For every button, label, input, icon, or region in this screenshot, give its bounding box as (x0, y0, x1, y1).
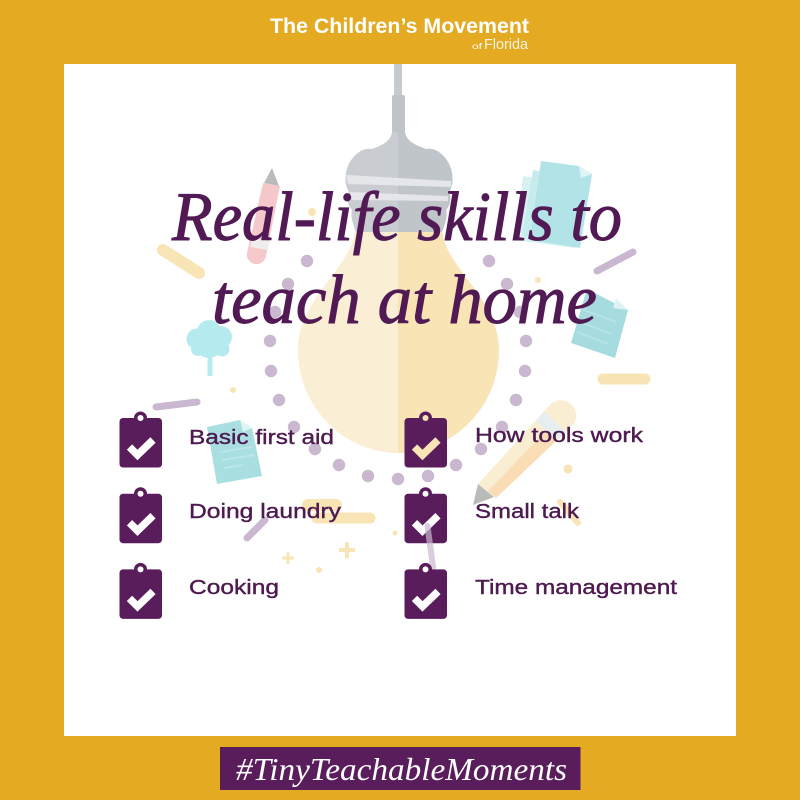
white panel (64, 64, 736, 736)
item: Doing laundry: Doing laundry (189, 500, 342, 523)
title: teach at home (212, 262, 597, 339)
header logo: The Children’s Movement (270, 15, 529, 38)
item: Small talk (404, 487, 580, 567)
header logo (270, 15, 529, 53)
checklist: right column (404, 412, 677, 619)
item: Basic first aid: Basic first aid (189, 426, 334, 449)
illustration: big yellow pencil (473, 400, 576, 505)
illustration: light bulb (298, 64, 499, 453)
illustration: small pink pencil (247, 168, 280, 264)
illustration: paper lower left (207, 420, 262, 484)
item: How tools work: How tools work (475, 424, 644, 447)
title: Real-life skills to (171, 179, 622, 256)
illustration: paper stack top right (515, 161, 592, 248)
item: Doing laundry (120, 487, 342, 543)
illustration: tree (186, 320, 232, 376)
illustration: confetti dots and plus signs (230, 208, 572, 573)
item: Cooking (120, 563, 279, 619)
illustration: dotted ring (264, 255, 532, 485)
hashtag banner: #TinyTeachableMoments (236, 751, 567, 787)
item: Basic first aid (120, 412, 334, 468)
item: How tools work (404, 412, 644, 468)
checklist: left column (120, 412, 342, 619)
header logo: Florida (484, 37, 529, 53)
header logo: of (472, 42, 483, 51)
item: Time management: Time management (475, 576, 677, 599)
item: Cooking: Cooking (189, 576, 279, 599)
item: Small talk: Small talk (475, 500, 580, 523)
illustration: paper lower right (571, 289, 628, 358)
item: Time management (404, 563, 677, 619)
illustration: confetti bars (156, 250, 645, 538)
title (171, 179, 622, 339)
